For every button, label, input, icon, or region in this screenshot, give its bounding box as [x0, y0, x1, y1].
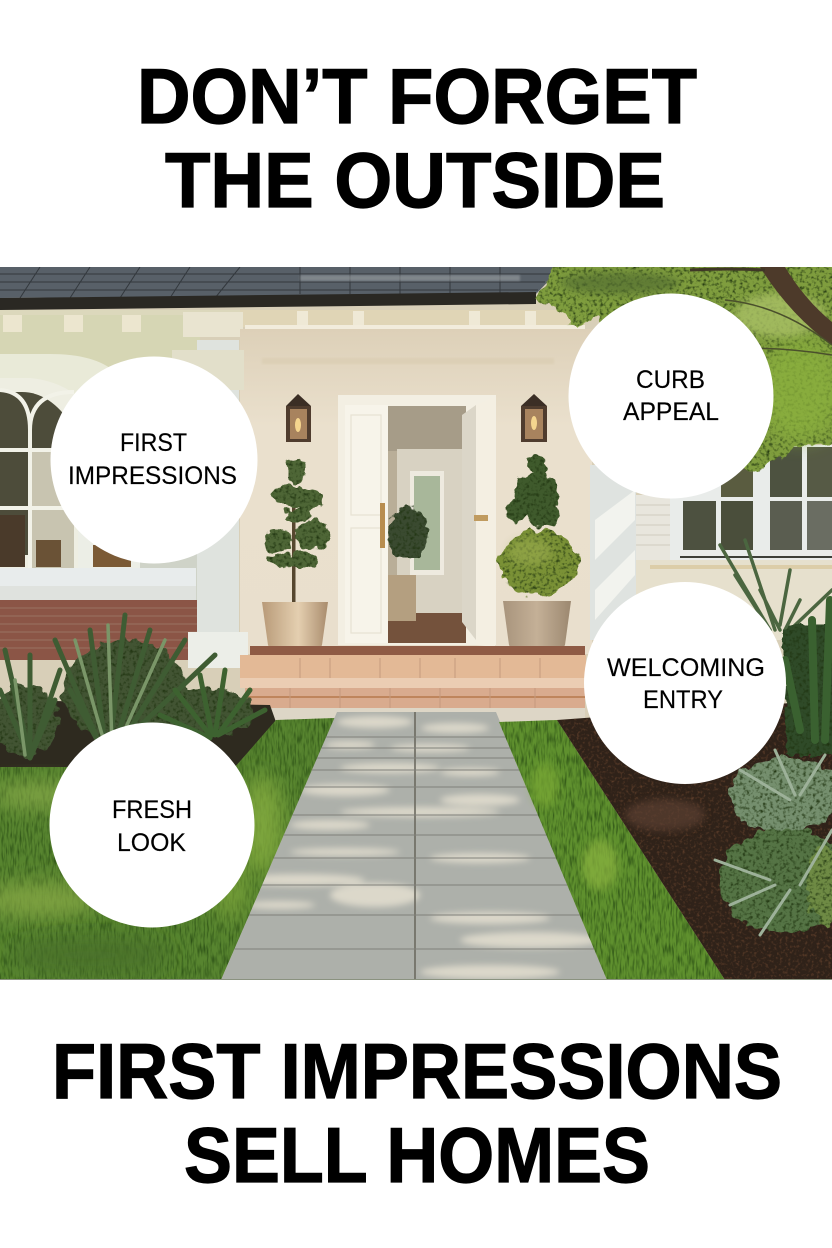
topiary right — [499, 454, 579, 655]
callout: first impressions: IMPRESSIONS — [68, 462, 237, 490]
shrubs right — [715, 540, 832, 935]
callout: fresh look: LOOK — [117, 829, 186, 857]
column — [172, 340, 248, 668]
front steps — [235, 655, 586, 722]
callout: fresh look — [50, 722, 254, 928]
closing headline: FIRST IMPRESSIONS — [52, 1027, 782, 1115]
callout: first impressions — [50, 356, 258, 564]
planter right — [503, 601, 571, 646]
upper wall and eaves — [0, 310, 590, 600]
title: DON’T FORGET — [137, 52, 697, 140]
roof — [0, 267, 562, 310]
brick base — [0, 600, 197, 660]
callout: welcoming entry: ENTRY — [643, 686, 723, 714]
topiary left — [262, 458, 328, 656]
photo: house front entry and walkway — [0, 262, 832, 980]
closing headline — [52, 1027, 782, 1199]
left planting bed — [0, 700, 276, 767]
right wall and window — [590, 445, 832, 640]
lantern left — [286, 394, 311, 442]
tree trunk — [760, 267, 832, 345]
title — [137, 52, 697, 224]
interior plant — [388, 508, 428, 621]
callout: first impressions: FIRST — [120, 429, 187, 457]
walkway — [220, 712, 607, 980]
callout: welcoming entry: WELCOMING — [607, 654, 765, 682]
title: THE OUTSIDE — [165, 136, 665, 224]
porch wall — [240, 329, 592, 654]
brick threshold — [250, 646, 585, 655]
lantern right — [521, 394, 547, 442]
callout: fresh look: FRESH — [112, 796, 192, 824]
photo bottom edge — [0, 979, 832, 980]
open door — [338, 395, 496, 647]
arched window — [0, 354, 196, 600]
shrubs left — [0, 615, 265, 758]
closing headline: SELL HOMES — [184, 1111, 650, 1199]
callout: curb appeal: APPEAL — [623, 398, 719, 426]
tree canopy — [536, 262, 832, 472]
callout: curb appeal: CURB — [636, 366, 705, 394]
planter left — [262, 602, 328, 646]
lawn left — [0, 718, 335, 980]
callout: curb appeal — [568, 294, 774, 498]
lawn right — [499, 720, 725, 980]
mulch bed — [557, 700, 832, 980]
callout: welcoming entry — [584, 582, 786, 784]
